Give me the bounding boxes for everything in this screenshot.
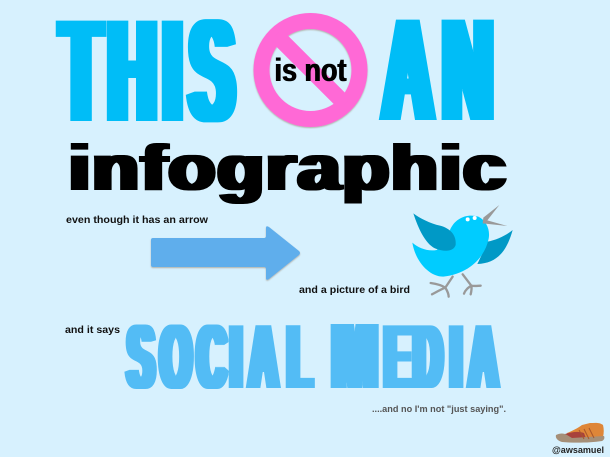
credit: @awsamuel: @awsamuel bbox=[552, 445, 604, 455]
caption: arrow: even though it has an arrow bbox=[66, 215, 208, 226]
heading: infographic: infographic bbox=[69, 131, 508, 204]
bird near wing bbox=[413, 213, 456, 251]
bird body bbox=[412, 216, 489, 277]
caption: social media lead-in: and it says bbox=[65, 325, 120, 336]
bird far wing bbox=[477, 230, 513, 264]
headline: SOCIAL MEDIA bbox=[124, 324, 501, 389]
bird beak bbox=[483, 205, 507, 226]
headline: SOCIAL MEDIA: M bbox=[331, 271, 378, 417]
arrow bbox=[151, 226, 300, 280]
icon: bird bbox=[412, 205, 513, 297]
label: is not: is not bbox=[274, 52, 347, 88]
icon: prohibition sign with "is not" bbox=[262, 21, 360, 119]
headline: SOCIAL MEDIA: EDIA bbox=[385, 306, 498, 407]
caption: bird: and a picture of a bird bbox=[299, 285, 410, 296]
headline: SOCIAL MEDIA: SOCIAL bbox=[128, 306, 311, 407]
footnote: ....and no I'm not "just saying". bbox=[372, 404, 506, 414]
bird eyes bbox=[466, 216, 477, 221]
icon: shoe bbox=[556, 423, 604, 443]
bird legs bbox=[431, 274, 481, 297]
